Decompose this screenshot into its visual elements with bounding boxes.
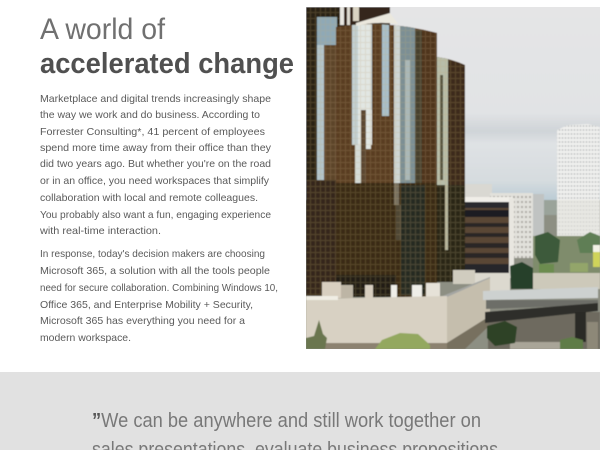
foreground bush and palm	[306, 320, 430, 349]
text block: intro paragraph: with real-time interaction.	[39, 225, 161, 237]
text block: Microsoft 365 paragraph: modern workspace.	[40, 332, 131, 344]
main tower	[336, 17, 437, 302]
text block: Microsoft 365 paragraph: In response, today's decision makers are choosing	[40, 248, 265, 260]
dark mid-rise building	[463, 197, 514, 291]
text block: intro paragraph: Marketplace and digital trends increasingly shape	[40, 93, 271, 105]
trees and street	[510, 232, 600, 289]
white tower	[557, 124, 600, 242]
text block: Microsoft 365 paragraph	[40, 248, 278, 344]
text block: intro paragraph: did two years ago. But whether you're on the road	[40, 158, 271, 170]
title: accelerated change	[40, 48, 294, 80]
quote text	[92, 410, 503, 450]
roof crown	[356, 13, 398, 26]
text block: intro paragraph: or in an office, you need workspaces that simplify	[40, 175, 270, 187]
right tower	[437, 55, 465, 285]
title: A world of	[40, 13, 166, 46]
concrete podium	[306, 270, 490, 349]
bridge and road	[483, 287, 600, 349]
back tower	[306, 7, 390, 297]
text block: intro paragraph: You probably also want a fun, engaging experience	[40, 209, 271, 221]
text block: intro paragraph	[39, 93, 272, 237]
text block: Microsoft 365 paragraph: Microsoft 365, a solution with all the tools people	[40, 265, 270, 277]
text block: Microsoft 365 paragraph: Microsoft 365 has everything you need for a	[40, 315, 245, 327]
text block: Microsoft 365 paragraph: Office 365, and Enterprise Mobility + Security,	[40, 299, 253, 311]
distant buildings	[465, 184, 557, 258]
text block: intro paragraph: spend more time away from their office than they	[40, 142, 272, 154]
text block: intro paragraph: Forrester Consulting*, 41 percent of employees	[40, 126, 265, 138]
quote text: ”We can be anywhere and still work together on	[92, 410, 481, 432]
text block: intro paragraph: the way we work and do business. According to	[40, 109, 260, 121]
photo: office towers	[300, 0, 600, 355]
quote band	[0, 372, 600, 450]
text block: intro paragraph: collaboration with local and remote colleagues.	[40, 192, 258, 204]
text block: Microsoft 365 paragraph: need for secure collaboration. Combining Windows 10,	[40, 282, 278, 294]
title	[40, 13, 294, 80]
